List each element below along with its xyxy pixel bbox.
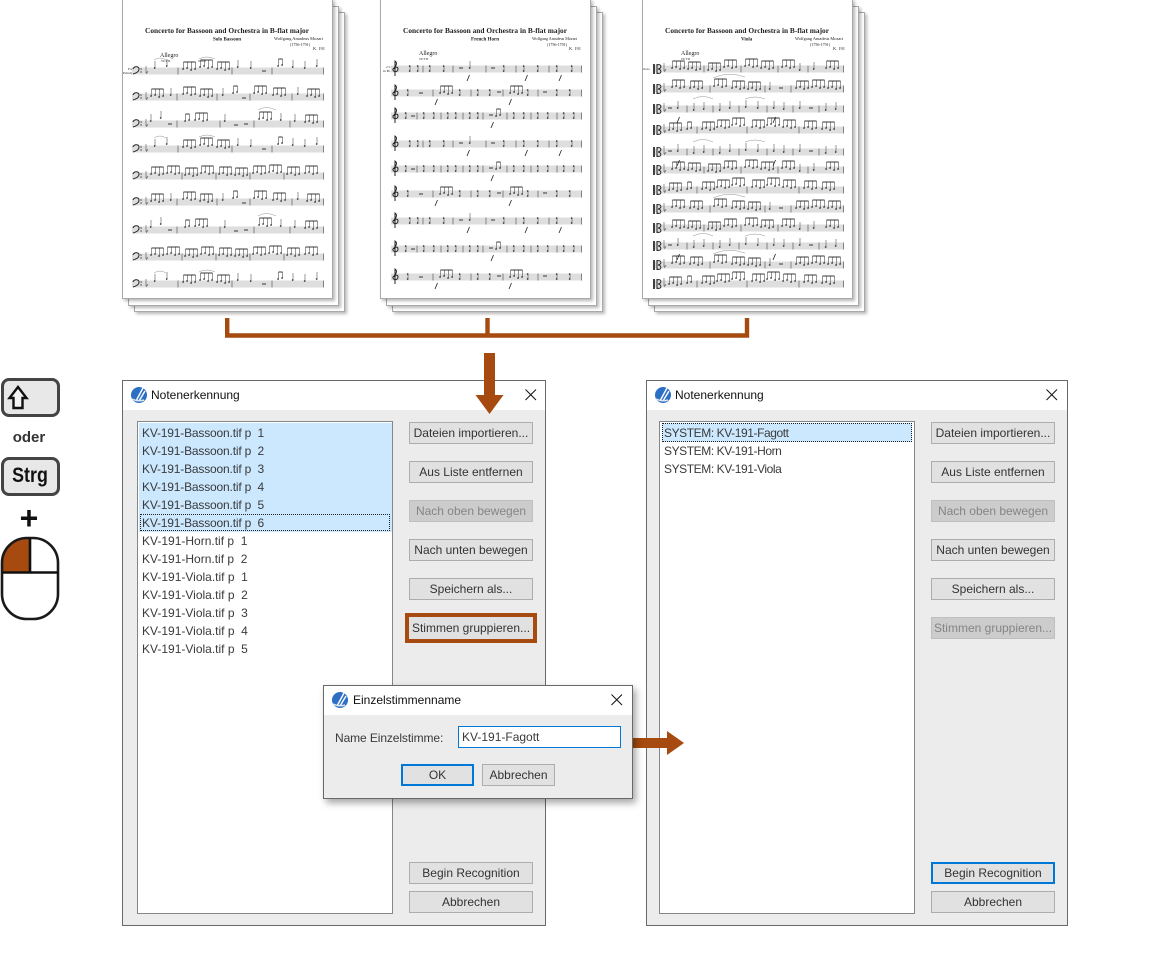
button: Aus Liste entfernen: Aus Liste entfernen xyxy=(419,465,523,479)
file list: KV-191-Viola.tif p 1 xyxy=(142,570,248,584)
button: Nach oben bewegen (disabled): Nach oben bewegen xyxy=(416,504,526,518)
button: Nach oben bewegen (disabled) xyxy=(409,500,533,522)
button: OK xyxy=(401,764,474,786)
title bar xyxy=(647,381,1067,410)
score page: viola: Wolfgang Amadeus Mozart xyxy=(795,36,844,41)
dialog: Einzelstimmenname xyxy=(323,685,633,799)
grouped parts list: SYSTEM: KV-191-Fagott xyxy=(664,426,789,440)
button: Speichern als: Speichern als... xyxy=(952,582,1034,596)
button: Dateien importieren: Dateien importieren... xyxy=(414,426,528,440)
file list: KV-191-Horn.tif p 1 xyxy=(142,534,247,548)
file list: KV-191-Viola.tif p 2 xyxy=(142,588,248,602)
score page: solo bassoon: Fagotto xyxy=(128,67,139,71)
score page: solo bassoon: Wolfgang Amadeus Mozart xyxy=(274,36,324,41)
file list: KV-191-Bassoon.tif p 3 xyxy=(142,462,264,476)
button: Dateien importieren: Dateien importieren... xyxy=(936,426,1050,440)
file list: KV-191-Viola.tif p 4 xyxy=(142,624,248,638)
button: Abbrechen xyxy=(409,891,533,913)
file list: KV-191-Bassoon.tif p 2 xyxy=(142,444,264,458)
button: Aus Liste entfernen xyxy=(409,461,533,483)
button: Stimmen gruppieren highlighted xyxy=(405,613,537,643)
score page: solo bassoon: SOLO xyxy=(198,59,207,63)
file list: KV-191-Bassoon.tif p 6 xyxy=(142,516,264,530)
score page: viola: (1756-1791) xyxy=(810,42,831,47)
button: Nach oben bewegen (disabled): Nach oben bewegen xyxy=(938,504,1048,518)
score page: viola: Viola xyxy=(741,38,753,42)
score page: solo bassoon: TUTTI xyxy=(161,59,170,63)
window title: Notenerkennung xyxy=(675,388,764,402)
close icon xyxy=(525,389,536,400)
button: Speichern als: Speichern als... xyxy=(430,582,512,596)
button: Speichern als xyxy=(409,578,533,600)
button: Nach unten bewegen xyxy=(931,539,1055,561)
grouped parts list: SYSTEM: KV-191-Viola xyxy=(664,462,781,476)
button: Begin Recognition focused xyxy=(931,862,1055,884)
button: Abbrechen: Abbrechen xyxy=(442,895,500,909)
icon: app logo xyxy=(131,387,147,403)
score page: solo bassoon xyxy=(122,0,333,299)
window title: Notenerkennung xyxy=(151,388,240,402)
file list xyxy=(137,421,393,914)
score page: french horn: in B♭ alto xyxy=(383,69,397,73)
score page: french horn: French Horn xyxy=(471,38,499,42)
score page: french horn: K. 191 xyxy=(569,46,581,51)
focused selected row xyxy=(662,423,912,442)
name input xyxy=(458,726,621,748)
file list: KV-191-Bassoon.tif p 5 xyxy=(142,498,264,512)
score page: viola: Allegro xyxy=(681,51,699,57)
icon: Strg key: Strg xyxy=(12,464,47,487)
score page: solo bassoon: Concerto for Bassoon and Orchestra in B-flat major xyxy=(145,26,309,35)
button: Begin Recognition: Begin Recognition xyxy=(422,866,520,880)
button: Stimmen gruppieren (disabled): Stimmen gruppieren... xyxy=(934,621,1052,635)
stacked score pages: french horn xyxy=(380,0,607,316)
score page: french horn xyxy=(380,0,591,299)
file list: KV-191-Viola.tif p 5 xyxy=(142,642,248,656)
arrow: right to result dialog xyxy=(633,731,684,755)
button: Nach oben bewegen (disabled) xyxy=(931,500,1055,522)
button: Abbrechen xyxy=(482,764,555,786)
field label: Name Einzelstimme: xyxy=(335,731,443,745)
button: Begin Recognition focused: Begin Recognition xyxy=(944,866,1042,880)
file list: KV-191-Bassoon.tif p 1 xyxy=(142,426,264,440)
score page: viola: Concerto for Bassoon and Orchestra in B-flat major xyxy=(665,26,829,35)
score page: solo bassoon: Allegro xyxy=(160,53,178,59)
bracket connector joining the three score stacks xyxy=(225,318,750,338)
plus sign: + xyxy=(20,500,38,536)
button: Abbrechen: Abbrechen xyxy=(489,768,548,782)
score page: french horn: 2 Corni xyxy=(386,65,397,69)
score page: french horn: Concerto for Bassoon and Orchestra in B-flat major xyxy=(403,26,567,35)
focused row outline xyxy=(140,514,390,531)
grouped parts list xyxy=(659,421,915,914)
button: Aus Liste entfernen: Aus Liste entfernen xyxy=(941,465,1045,479)
button: Abbrechen: Abbrechen xyxy=(964,895,1022,909)
score page: viola xyxy=(642,0,853,299)
grouped parts list: SYSTEM: KV-191-Horn xyxy=(664,444,781,458)
dialog: Notenerkennung with file list xyxy=(122,380,546,926)
score page: french horn: (1756-1791) xyxy=(547,42,568,47)
name input: KV-191-Fagott xyxy=(462,730,539,744)
score page: solo bassoon: K. 191 xyxy=(313,46,325,51)
label: oder: oder xyxy=(13,429,45,446)
icon: app logo xyxy=(655,387,671,403)
window title: Einzelstimmenname xyxy=(353,693,461,707)
icon: app logo xyxy=(332,692,348,708)
button: Stimmen gruppieren highlighted: Stimmen gruppieren... xyxy=(412,621,530,635)
score page: french horn: Allegro xyxy=(419,51,437,57)
file list: KV-191-Bassoon.tif p 4 xyxy=(142,480,264,494)
close icon xyxy=(1046,389,1058,400)
icon: Strg key xyxy=(1,457,60,496)
stacked score pages: viola xyxy=(642,0,869,316)
score page: french horn: TUTTI xyxy=(419,57,428,61)
file list: KV-191-Horn.tif p 2 xyxy=(142,552,247,566)
score page: viola: K. 191 xyxy=(833,46,845,51)
button: Nach unten bewegen: Nach unten bewegen xyxy=(414,543,528,557)
file list: KV-191-Viola.tif p 3 xyxy=(142,606,248,620)
button: Begin Recognition xyxy=(409,862,533,884)
button: Speichern als xyxy=(931,578,1055,600)
button: Nach unten bewegen: Nach unten bewegen xyxy=(936,543,1050,557)
score page: french horn: Wolfgang Amadeus Mozart xyxy=(532,36,578,41)
arrow: down into dialog xyxy=(476,353,504,414)
title bar xyxy=(123,381,545,410)
dialog: Notenerkennung with grouped parts xyxy=(646,380,1068,926)
score page: solo bassoon: Principale xyxy=(123,71,138,75)
title bar xyxy=(324,686,632,715)
button: Nach unten bewegen xyxy=(409,539,533,561)
stacked score pages: solo bassoon xyxy=(122,0,349,316)
score page: solo bassoon: (1756-1791) xyxy=(290,42,311,47)
icon: shift key xyxy=(1,378,60,417)
button: Dateien importieren xyxy=(931,422,1055,444)
button: Abbrechen xyxy=(931,891,1055,913)
score page: viola: TUTTI xyxy=(681,57,690,61)
button: Dateien importieren xyxy=(409,422,533,444)
score page: solo bassoon: Solo Bassoon xyxy=(213,38,241,42)
button: Aus Liste entfernen xyxy=(931,461,1055,483)
selection highlight xyxy=(139,423,392,532)
button: OK: OK xyxy=(429,768,446,782)
button: Stimmen gruppieren (disabled) xyxy=(931,617,1055,639)
icon: mouse with left button highlighted xyxy=(0,536,60,620)
close icon xyxy=(611,694,622,706)
